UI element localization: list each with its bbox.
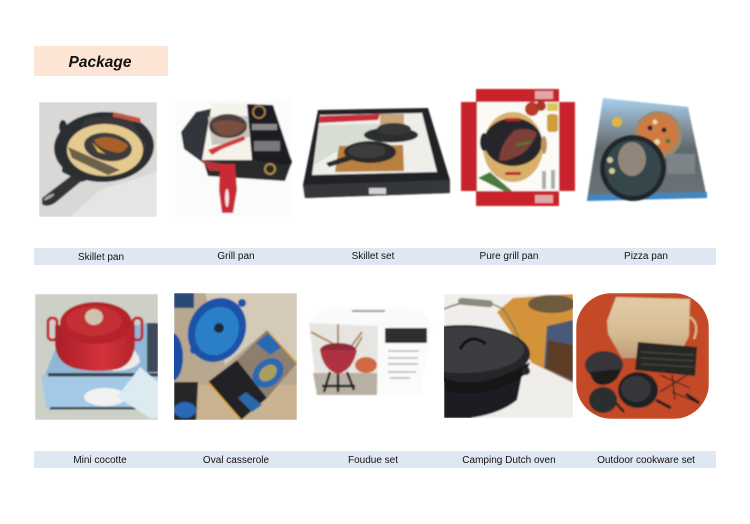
title: [34, 46, 168, 76]
product photo: grill pan: [175, 100, 292, 217]
product photo: outdoor cookware set: [576, 293, 709, 419]
label: Foudue set: Foudue set: [348, 455, 398, 466]
product photo: camping Dutch oven: [444, 294, 573, 418]
label: Oval casserole: Oval casserole: [203, 455, 270, 466]
label band: row one: [34, 248, 716, 265]
product photo: skillet pan: [39, 102, 157, 217]
label: Camping Dutch oven: Camping Dutch oven: [462, 455, 556, 466]
label: Outdoor cookware set: Outdoor cookware set: [597, 455, 695, 466]
product photo: pizza pan box: [587, 98, 707, 201]
label band: row two: [34, 451, 716, 468]
product photo: fondue set box: [309, 306, 432, 395]
label: Skillet pan: Skillet pan: [78, 252, 124, 263]
label: Pizza pan: Pizza pan: [624, 251, 668, 262]
label: Skillet set: Skillet set: [352, 251, 395, 262]
product photo: mini cocotte: [35, 294, 158, 420]
product photo: pure grill pan box: [461, 89, 575, 206]
product photo: oval casserole: [174, 293, 297, 420]
label: Grill pan: Grill pan: [217, 251, 255, 262]
label: Pure grill pan: Pure grill pan: [480, 251, 538, 262]
product photo: skillet set box: [303, 108, 450, 198]
label: Mini cocotte: Mini cocotte: [73, 455, 127, 466]
title: Package: [69, 54, 132, 71]
